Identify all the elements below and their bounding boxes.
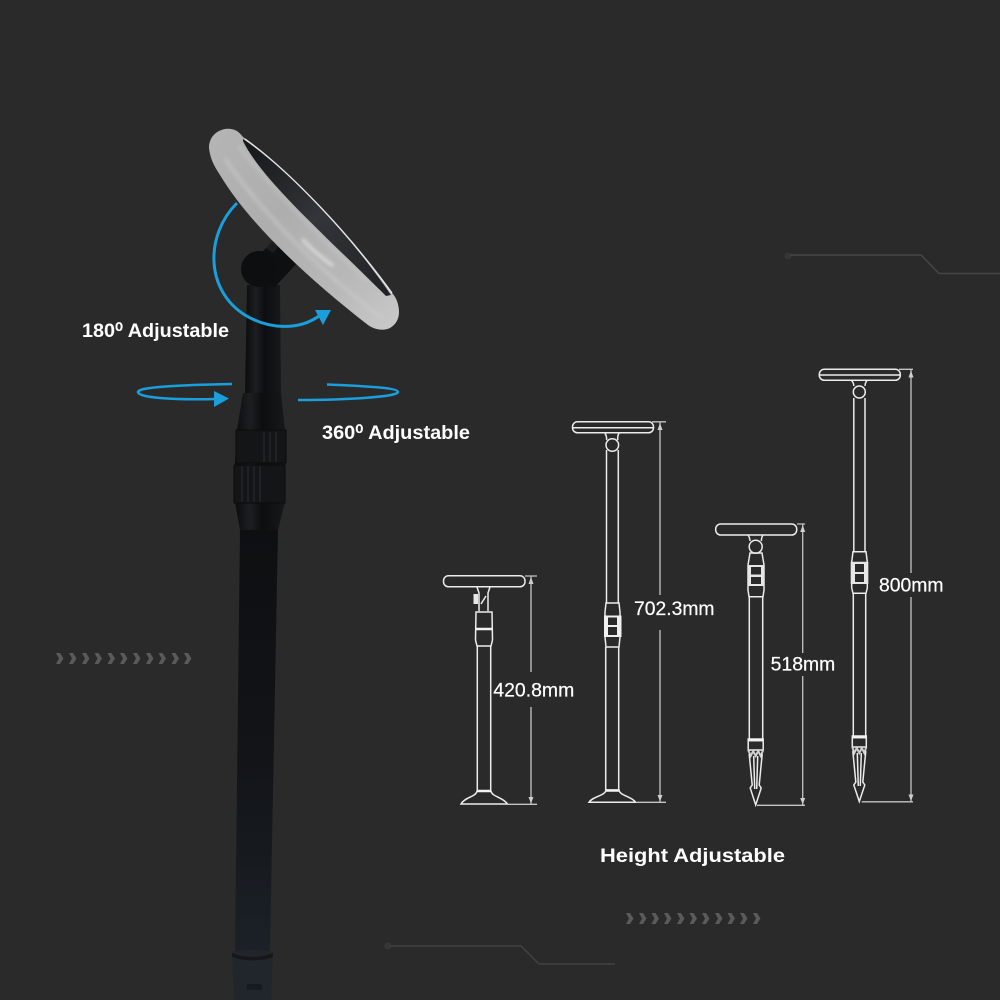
chevrons left: [56, 653, 192, 664]
decorative circuit line bottom: [384, 942, 615, 964]
decorative circuit line top right: [784, 252, 1000, 274]
dimension 702.3mm: 702.3mm: [634, 599, 714, 620]
chevrons bottom: [626, 913, 760, 924]
dimension 518mm: [757, 524, 835, 805]
label 360: 360⁰ Adjustable: [322, 422, 470, 444]
dimension 420.8mm: [493, 576, 574, 804]
spike 518: [748, 739, 763, 805]
spike 800: [852, 736, 866, 802]
dimension 420.8mm: 420.8mm: [493, 681, 574, 702]
diagram 420.8mm base: [444, 576, 525, 804]
dimension 518mm: 518mm: [771, 655, 835, 676]
upper pole: [245, 285, 281, 395]
diagram 702.3mm base: [572, 422, 654, 802]
dimension 702.3mm: [634, 422, 714, 802]
ring highlight: [226, 148, 382, 318]
lamp product photo: [209, 129, 399, 1000]
height lock collar: [234, 393, 286, 530]
diagram 800mm spike: [819, 369, 900, 802]
dimension 800mm: 800mm: [879, 576, 944, 597]
bottom collar: [232, 950, 273, 1000]
lower pole: [235, 528, 278, 952]
solar disc ring: [209, 129, 399, 330]
ball joint and arm: [241, 236, 298, 287]
180 degree rotation arrow: [214, 203, 331, 326]
360 degree rotation arrow right: [298, 384, 398, 400]
diagram 518mm spike: [716, 524, 797, 805]
heading height adjustable: Height Adjustable: [600, 845, 785, 867]
solar panel: [243, 139, 391, 296]
360 degree rotation arrow left: [138, 384, 232, 407]
panel rim: [245, 139, 392, 293]
label 180: 180⁰ Adjustable: [82, 320, 229, 342]
dimension 800mm: [862, 369, 944, 802]
